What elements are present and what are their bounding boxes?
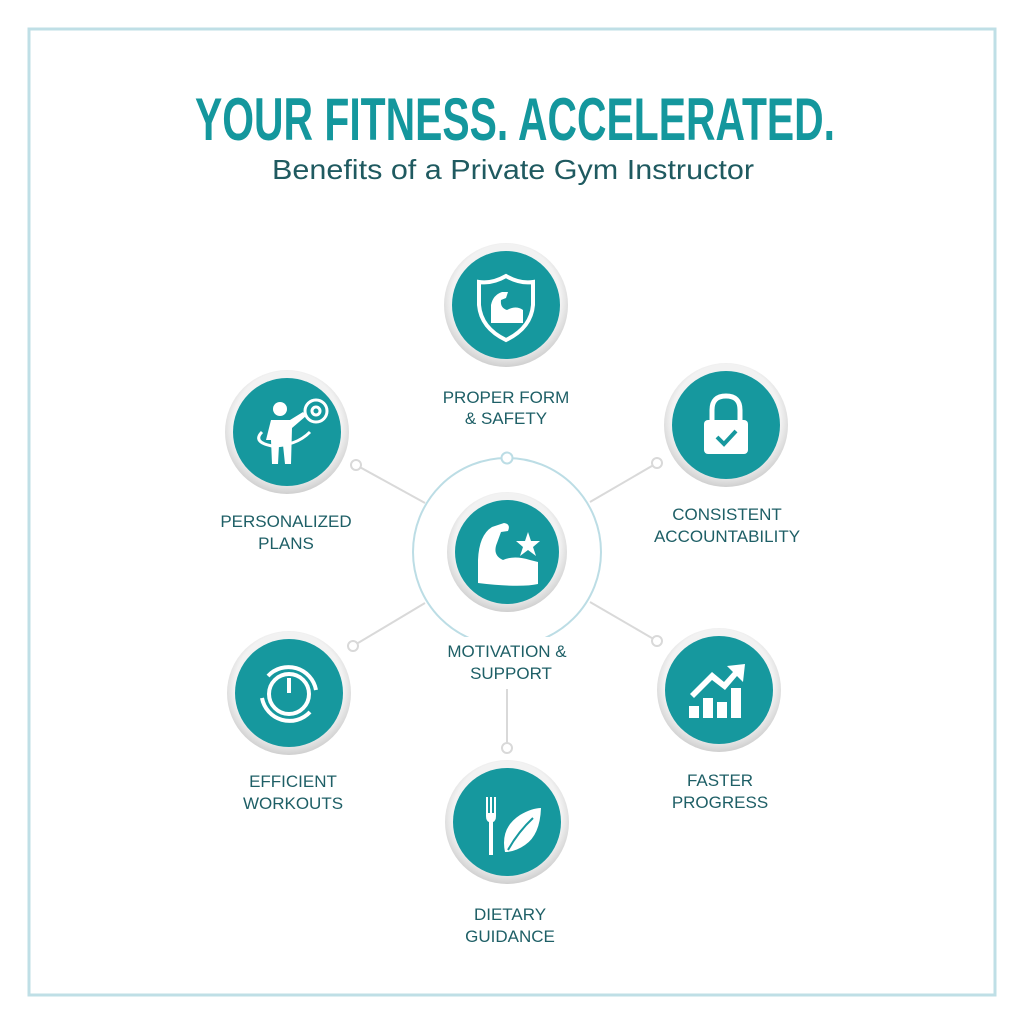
- text: GUIDANCE: [465, 927, 555, 946]
- text: CONSISTENT: [672, 505, 782, 524]
- icon: clock cycle: [262, 667, 316, 721]
- node: dietary guidance: [445, 760, 569, 884]
- node: personalized plans: [225, 370, 349, 494]
- node: consistent accountability: [664, 363, 788, 487]
- icon: fork and leaf: [486, 797, 541, 855]
- text: EFFICIENT: [249, 772, 337, 791]
- center node: motivation & support: [447, 492, 567, 612]
- node: proper form & safety: [444, 243, 568, 367]
- icon: bar chart up arrow: [689, 664, 745, 718]
- icon: flexed arm with star: [478, 523, 540, 586]
- icon: padlock: [712, 396, 740, 422]
- text: WORKOUTS: [243, 794, 343, 813]
- text: & SAFETY: [465, 409, 547, 428]
- node: faster progress: [657, 628, 781, 752]
- text: PLANS: [258, 534, 314, 553]
- node: efficient workouts: [227, 631, 351, 755]
- text: PROGRESS: [672, 793, 768, 812]
- icon: shield: [479, 276, 533, 340]
- text: SUPPORT: [470, 664, 552, 683]
- text: ACCOUNTABILITY: [654, 527, 800, 546]
- text: DIETARY: [474, 905, 546, 924]
- text: PERSONALIZED: [220, 512, 352, 531]
- center ring: [413, 458, 601, 646]
- connectors: [353, 463, 657, 743]
- text: FASTER: [687, 771, 753, 790]
- label: motivation: MOTIVATION &: [447, 642, 567, 661]
- subtitle: Benefits of a Private Gym Instructor: [272, 154, 754, 185]
- text: PROPER FORM: [443, 388, 569, 407]
- icon: person and target: [266, 402, 306, 464]
